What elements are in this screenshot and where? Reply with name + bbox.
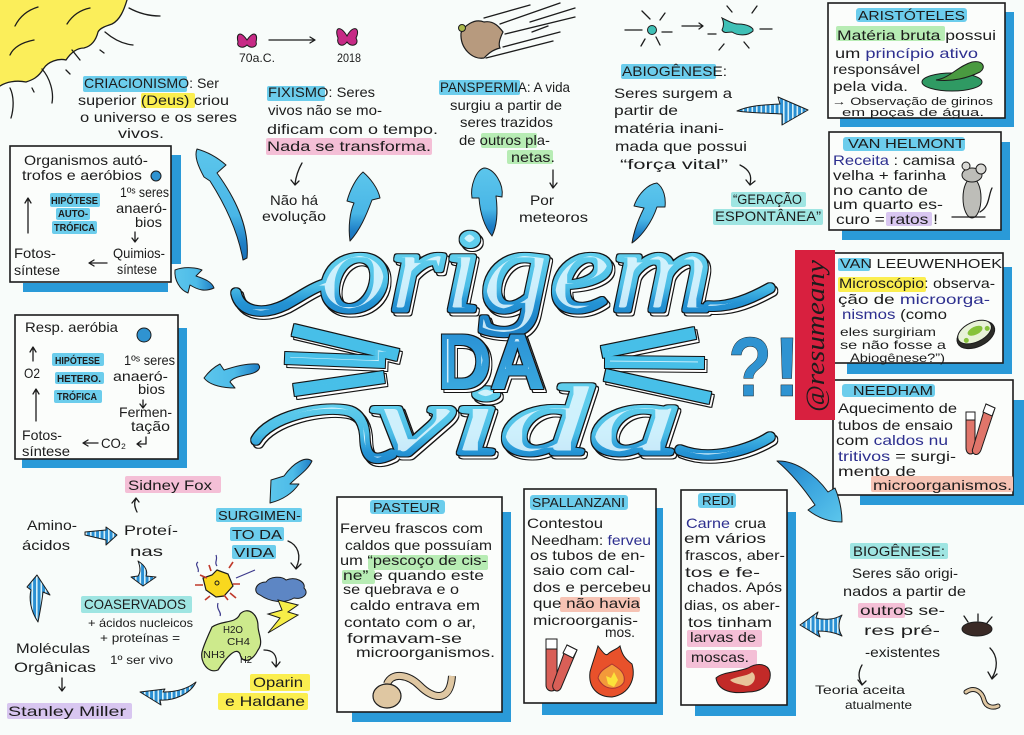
title: Origem da Vida xyxy=(236,208,801,474)
panel: autotrophic hypothesis: AUTO- xyxy=(58,209,88,220)
panel: Redi: moscas. xyxy=(691,649,749,665)
icon: aerobic dot xyxy=(137,328,151,342)
label: @resumeany red tag xyxy=(795,250,835,420)
panel: Van Leeuwenhoek: eles surgiriam xyxy=(840,325,936,339)
arrow: to heterotrophic panel xyxy=(204,364,260,388)
panel: Pasteur: contato com o ar, xyxy=(344,614,476,630)
text block: Panspermia: seres trazidos xyxy=(460,114,553,130)
icon: test tubes and flame xyxy=(546,639,633,697)
title word: origem: origem xyxy=(320,208,712,336)
text block: Biogenese: outros se- xyxy=(860,602,945,618)
panel: heterotrophic hypothesis: 1ºˢ seres xyxy=(124,352,175,368)
icon: primitive atmosphere blob: CH4 xyxy=(227,637,250,648)
panel: heterotrophic hypothesis: Fotos- xyxy=(22,427,62,443)
text block: Abiogenese: “GERAÇÃO xyxy=(733,191,802,207)
panel: Aristoteles: pela vida. xyxy=(833,78,908,94)
panel: autotrophic hypothesis: TRÓFICA xyxy=(54,221,95,234)
icon: meteor xyxy=(458,3,575,58)
label: Oparin e Haldane: Oparin xyxy=(253,674,303,690)
arrow: Panspermia xyxy=(472,168,502,236)
panel: autotrophic hypothesis: trofos e aeróbios xyxy=(22,167,142,183)
panel: heterotrophic hypothesis: síntese xyxy=(22,443,70,459)
heading: Surgimento da Vida xyxy=(216,508,302,569)
panel: heterotrophic hypothesis: Fermen- xyxy=(119,404,172,420)
panel: heterotrophic hypothesis: tação xyxy=(131,418,170,434)
section: origem da vida bottom-left cycle xyxy=(7,476,310,719)
text block: Biogenese: atualmente xyxy=(845,698,912,712)
emphasis bars xyxy=(285,330,710,398)
icon: lightning xyxy=(268,600,298,633)
text block: Biogenese: BIOGÊNESE: xyxy=(853,543,945,559)
panel: Redi: REDI xyxy=(702,493,734,508)
panel: Redi xyxy=(681,490,796,716)
icon: tadpole on pond xyxy=(922,62,983,91)
label: Stanley Miller xyxy=(7,703,132,719)
text block: Biogenese: nados a partir de xyxy=(843,583,966,599)
text: coacervados: COASERVADOS xyxy=(84,596,186,612)
text block: Panspermia: de outros pla- xyxy=(459,132,550,148)
panel: Van Helmont: VAN HELMONT xyxy=(848,136,965,151)
text block: Panspermia: meteoros xyxy=(519,209,588,225)
text: moleculas organicas: Moléculas xyxy=(16,640,90,656)
text: aminoacidos: ácidos xyxy=(22,537,70,553)
arrow: Abiogenese xyxy=(632,183,665,243)
text block: Biogenese: Seres são origi- xyxy=(852,565,958,581)
text: moleculas organicas xyxy=(14,640,96,691)
panel: autotrophic hypothesis xyxy=(10,146,181,292)
text: coacervados: 1º ser vivo xyxy=(110,653,173,667)
panel: Spallanzani: saio com cal- xyxy=(533,562,635,578)
title word: vida: vida xyxy=(372,367,680,474)
arrow: aminoacids to proteins xyxy=(85,527,117,545)
panel: Needham: mento de xyxy=(838,463,916,479)
arrow: coacervates back to molecules xyxy=(140,682,196,705)
arrow: proteins to coacervates xyxy=(131,561,156,586)
panel: heterotrophic hypothesis: bios xyxy=(138,381,165,397)
panel: Aristoteles: um princípio ativo xyxy=(835,45,978,61)
panel: heterotrophic hypothesis: TRÓFICA xyxy=(57,390,97,403)
label: Sidney Fox xyxy=(125,476,221,493)
icon: sun star xyxy=(195,555,255,616)
text block: Abiogenese xyxy=(614,63,823,225)
panel: Pasteur: caldos que possuíam xyxy=(345,537,492,553)
panel: Van Leeuwenhoek: Microscópio: observa- xyxy=(839,275,995,291)
panel: autotrophic hypothesis: bios xyxy=(135,214,162,230)
arrow: striped to Aristoteles xyxy=(737,97,808,125)
panel: Van Helmont: curo = ratos ! xyxy=(836,211,938,227)
panel: Needham: NEEDHAM xyxy=(853,383,933,398)
text block: Fixismo: FIXISMO: Seres xyxy=(268,84,375,100)
panel: heterotrophic hypothesis: HIPÓTESE xyxy=(55,354,100,367)
title word: da: DA xyxy=(438,320,544,405)
icon: test tubes xyxy=(966,404,995,454)
panel: autotrophic hypothesis: síntese xyxy=(117,261,157,277)
icon: butterflies timeline: 70a.C. xyxy=(239,51,275,65)
panel: Van Leeuwenhoek: Abiogênese?”) xyxy=(850,351,945,365)
icon: rat xyxy=(952,162,992,218)
icon: meat xyxy=(716,665,770,693)
panel: Aristoteles: ARISTÓTELES xyxy=(858,8,965,23)
panel: Spallanzani: dos e percebeu xyxy=(533,579,651,595)
panel: Spallanzani: mos. xyxy=(605,624,635,640)
panel: Spallanzani: microorganis- xyxy=(533,612,638,628)
panel: heterotrophic hypothesis xyxy=(15,315,187,468)
icon: abiogenesis dot and fish xyxy=(625,6,772,50)
panel: autotrophic hypothesis: síntese xyxy=(14,262,60,278)
text: proteinas xyxy=(124,498,178,559)
panel: Redi: frascos, aber- xyxy=(685,547,785,563)
panel: Pasteur: microorganismos. xyxy=(356,644,495,660)
text: coacervados: + ácidos nucleicos xyxy=(88,616,193,630)
icon: fly and worm xyxy=(962,614,998,707)
text block: Criacionismo: CRIACIONISMO: Ser xyxy=(84,75,219,91)
panel: Needham: microorganismos. xyxy=(873,477,1012,493)
panel: autotrophic hypothesis: Fotos- xyxy=(14,245,56,261)
panel: Aristoteles xyxy=(828,3,1014,127)
panel: autotrophic hypothesis: Quimios- xyxy=(113,245,165,261)
panel: Needham: com caldos nu xyxy=(836,432,948,448)
panel: Van Leeuwenhoek: nismos (como xyxy=(842,306,947,322)
panel: heterotrophic hypothesis: O2 xyxy=(24,365,40,381)
text block: Criacionismo: o universo e os seres xyxy=(80,109,237,125)
text block: Panspermia: netas. xyxy=(511,149,555,165)
panel: Pasteur: Ferveu frascos com xyxy=(340,520,483,536)
panel: Aristoteles: responsável xyxy=(833,61,920,77)
text: moleculas organicas: Orgânicas xyxy=(14,659,96,675)
panel: Pasteur: se quebrava e o xyxy=(343,581,459,597)
text block: Panspermia: Por xyxy=(530,192,554,208)
panel: Spallanzani: que não havia xyxy=(533,595,640,611)
panel: Spallanzani: os tubos de en- xyxy=(530,547,645,563)
text: aminoacidos xyxy=(22,517,77,553)
panel: Redi: dias, os aber- xyxy=(684,597,780,613)
arrow: to autotrophic panel xyxy=(175,268,214,293)
panel: Van Leeuwenhoek xyxy=(834,253,1012,374)
icon: primitive atmosphere blob xyxy=(202,611,280,671)
panel: Aristoteles: → Observação de girinos xyxy=(832,96,994,108)
label: Oparin e Haldane: e Haldane xyxy=(225,693,305,709)
panel: Needham xyxy=(833,380,1024,505)
panel: Spallanzani xyxy=(524,489,663,715)
panel: Redi: Carne crua xyxy=(686,515,766,531)
text block: Fixismo xyxy=(262,84,438,224)
arrow: Criacionismo xyxy=(196,149,247,260)
text block: Fixismo: vivos não se mo- xyxy=(268,102,382,118)
title word: vida xyxy=(256,367,770,474)
panel: Needham: Aquecimento de xyxy=(838,400,957,416)
label: Stanley Miller: Stanley Miller xyxy=(8,703,126,719)
text: proteinas: Proteí- xyxy=(124,522,178,538)
icon: swan-neck flask xyxy=(373,676,452,708)
panel: Pasteur xyxy=(337,497,511,722)
text block: Biogenese xyxy=(815,543,966,712)
panel: Spallanzani: Contestou xyxy=(527,515,603,531)
text block: Criacionismo: superior (Deus) criou xyxy=(78,92,229,108)
panel: Van Leeuwenhoek: VAN LEEUWENHOEK xyxy=(840,256,1002,271)
panel: Needham: tubos de ensaio xyxy=(838,417,953,433)
panel: Van Helmont: velha + farinha xyxy=(833,167,946,183)
text block: Panspermia: surgiu a partir de xyxy=(450,97,562,113)
text block: Panspermia xyxy=(439,79,588,225)
icon: microscope slide xyxy=(952,315,999,354)
icon: primitive atmosphere blob: H2 xyxy=(240,655,252,666)
heading: Surgimento da Vida: VIDA xyxy=(234,545,274,560)
panel: Van Leeuwenhoek: se não fosse a xyxy=(840,338,946,352)
panel: Redi: chados. Após xyxy=(687,579,782,595)
arrow: Fixismo xyxy=(347,172,380,241)
panel: autotrophic hypothesis: anaeró- xyxy=(116,200,167,216)
panel: autotrophic hypothesis: 1ºˢ seres xyxy=(120,184,169,200)
panel: Van Helmont: Receita : camisa xyxy=(833,152,955,168)
text block: Fixismo: dificam com o tempo. xyxy=(267,121,438,137)
panel: Pasteur: PASTEUR xyxy=(373,500,440,515)
icon: storm cloud xyxy=(256,577,306,602)
panel: Pasteur: um “pescoço de cis- xyxy=(340,552,487,568)
panel: Aristoteles: Matéria bruta possui xyxy=(837,27,996,43)
panel: heterotrophic hypothesis: anaeró- xyxy=(113,368,168,384)
text block: Fixismo: evolução xyxy=(262,208,326,224)
text block: Panspermia: PANSPERMIA: A vida xyxy=(440,79,570,95)
heading: Surgimento da Vida: SURGIMEN- xyxy=(218,508,301,523)
panel: Pasteur: caldo entrava em xyxy=(350,597,480,613)
panel: Van Helmont xyxy=(829,132,1010,240)
panel: Redi: tos tinham xyxy=(688,614,772,630)
panel: heterotrophic hypothesis: Resp. aeróbia xyxy=(25,319,118,335)
panel: heterotrophic hypothesis: CO₂ xyxy=(101,435,126,451)
panel: Van Helmont: um quarto es- xyxy=(833,196,943,212)
text block: Biogenese: -existentes xyxy=(865,644,940,660)
icon: aerobic dot xyxy=(151,171,161,181)
title word: origem xyxy=(236,208,770,336)
panel: Pasteur: formavam-se xyxy=(347,630,462,646)
text block: Criacionismo xyxy=(78,75,237,141)
text block: Biogenese: Teoria aceita xyxy=(815,683,905,697)
panel: heterotrophic hypothesis: HETERO. xyxy=(57,374,101,385)
text: coacervados: + proteínas = xyxy=(100,631,180,645)
label: Sidney Fox: Sidney Fox xyxy=(128,477,212,493)
icon: primitive atmosphere blob: H2O xyxy=(223,625,243,636)
arrow: striped to Biogenese xyxy=(800,612,842,637)
icon: butterflies timeline xyxy=(237,29,361,65)
heading: Surgimento da Vida: TO DA xyxy=(232,527,282,542)
text: coacervados xyxy=(81,596,193,667)
question and exclamation marks: ! xyxy=(773,320,801,414)
text block: Abiogenese: partir de xyxy=(614,102,678,118)
panel: Aristoteles: em poças de água. xyxy=(842,107,984,119)
arrow: molecules to amino acids xyxy=(27,575,50,622)
text block: Abiogenese: ABIOGÊNESE: xyxy=(622,63,727,79)
text: proteinas: nas xyxy=(130,543,163,559)
icon: primitive atmosphere blob: NH3 xyxy=(203,650,225,661)
label: @resumeany red tag: @resumeany xyxy=(801,259,830,412)
text block: Abiogenese: “força vital” xyxy=(620,156,729,172)
text block: Abiogenese: matéria inani- xyxy=(614,120,724,136)
panel: Needham: tritivos = surgi- xyxy=(838,448,956,464)
panel: Spallanzani: SPALLANZANI xyxy=(532,495,625,510)
question and exclamation marks: ? xyxy=(728,320,772,414)
text block: Criacionismo: vivos. xyxy=(118,125,164,141)
panel: Redi: tos e fe- xyxy=(685,564,760,580)
icon: butterflies timeline: 2018 xyxy=(337,51,361,65)
arrow: to Biogenese xyxy=(777,461,842,522)
text: aminoacidos: Amino- xyxy=(27,517,77,533)
panel: Van Leeuwenhoek: ção de microorga- xyxy=(838,291,990,307)
panel: autotrophic hypothesis: HIPÓTESE xyxy=(51,194,98,207)
arrow: to Surgimento da Vida xyxy=(270,459,312,503)
text block: Fixismo: Não há xyxy=(270,192,318,208)
text block: Biogenese: res pré- xyxy=(864,622,941,638)
panel: Pasteur: ne” e quando este xyxy=(343,567,484,583)
text block: Abiogenese: mada que possui xyxy=(615,138,747,154)
panel: Spallanzani: Needham: ferveu xyxy=(531,532,651,548)
text block: Abiogenese: Seres surgem a xyxy=(614,85,732,101)
panel: Redi: em vários xyxy=(684,530,766,546)
icon: sun in corner xyxy=(0,0,160,118)
text block: Abiogenese: ESPONTÂNEA” xyxy=(715,208,821,224)
panel: autotrophic hypothesis: Organismos autó- xyxy=(24,152,148,168)
text block: Fixismo: Nada se transforma. xyxy=(267,138,431,154)
panel: Van Helmont: no canto de xyxy=(833,182,928,198)
panel: Redi: larvas de xyxy=(690,629,756,645)
label: Oparin e Haldane xyxy=(218,674,310,710)
